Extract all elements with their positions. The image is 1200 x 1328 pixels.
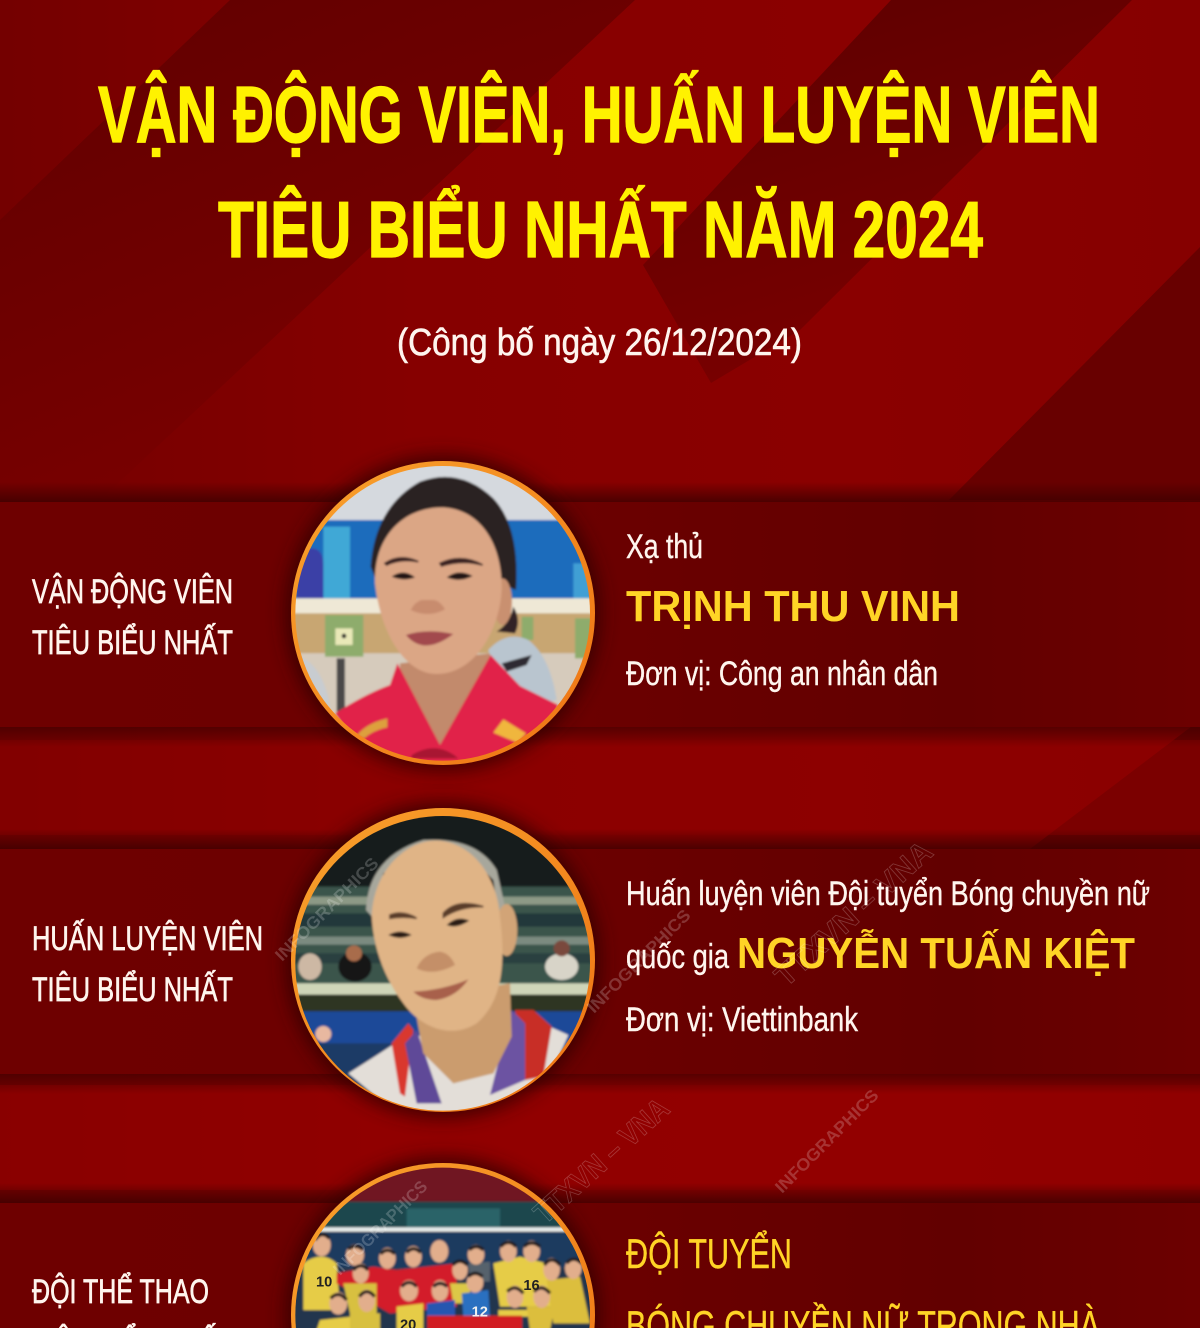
title <box>98 70 1100 274</box>
text: best team details: ĐỘI TUYỂN <box>626 1229 792 1277</box>
label: best coach category: TIÊU BIỂU NHẤT <box>32 971 233 1009</box>
panel: best athlete <box>0 455 1200 771</box>
watermarks: INFOGRAPHICS <box>329 1177 431 1279</box>
text: best athlete details: Đơn vị: Công an nhân dân <box>626 655 938 693</box>
portrait: national women's volleyball team: 12 <box>472 1305 488 1321</box>
label: best athlete category: TIÊU BIỂU NHẤT <box>32 624 233 662</box>
text: best team details <box>626 1229 1100 1328</box>
watermarks: INFOGRAPHICS <box>583 906 694 1017</box>
label: best athlete category <box>32 573 233 662</box>
text: best coach details: Đơn vị: Viettinbank <box>626 1001 859 1039</box>
text: best athlete details <box>626 528 960 693</box>
label: best athlete category: VẬN ĐỘNG VIÊN <box>32 573 233 611</box>
portrait: national women's volleyball team <box>285 1157 601 1328</box>
portrait: national women's volleyball team: 10 <box>316 1275 332 1291</box>
portrait: Trịnh Thu Vinh <box>285 455 601 771</box>
label: best coach category: HUẤN LUYỆN VIÊN <box>32 920 263 958</box>
label: best team category: ĐỘI THỂ THAO <box>32 1273 209 1311</box>
text: best athlete details: Xạ thủ <box>626 528 703 566</box>
text: best athlete details: TRỊNH THU VINH <box>626 582 960 631</box>
watermarks: TTXVN – VNA <box>528 1092 676 1230</box>
portrait: Nguyễn Tuấn Kiệt <box>285 802 601 1118</box>
watermarks: INFOGRAPHICS <box>771 1086 882 1197</box>
text: best coach details <box>626 875 1150 1039</box>
watermarks: TTXVN – VNA <box>769 835 939 993</box>
text: best coach details: quốc gia <box>626 938 729 976</box>
label: best coach category <box>32 920 263 1009</box>
watermarks <box>271 835 939 1279</box>
text: best coach details: NGUYỄN TUẤN KIỆT <box>737 928 1135 978</box>
panel: best sports team <box>0 1157 1200 1328</box>
portrait: national women's volleyball team: 16 <box>523 1278 540 1294</box>
subtitle: announcement date: (Công bố ngày 26/12/2024) <box>397 322 802 364</box>
panel: best coach <box>0 802 1200 1118</box>
label: best team category <box>32 1273 233 1328</box>
watermarks: INFOGRAPHICS <box>271 854 382 965</box>
